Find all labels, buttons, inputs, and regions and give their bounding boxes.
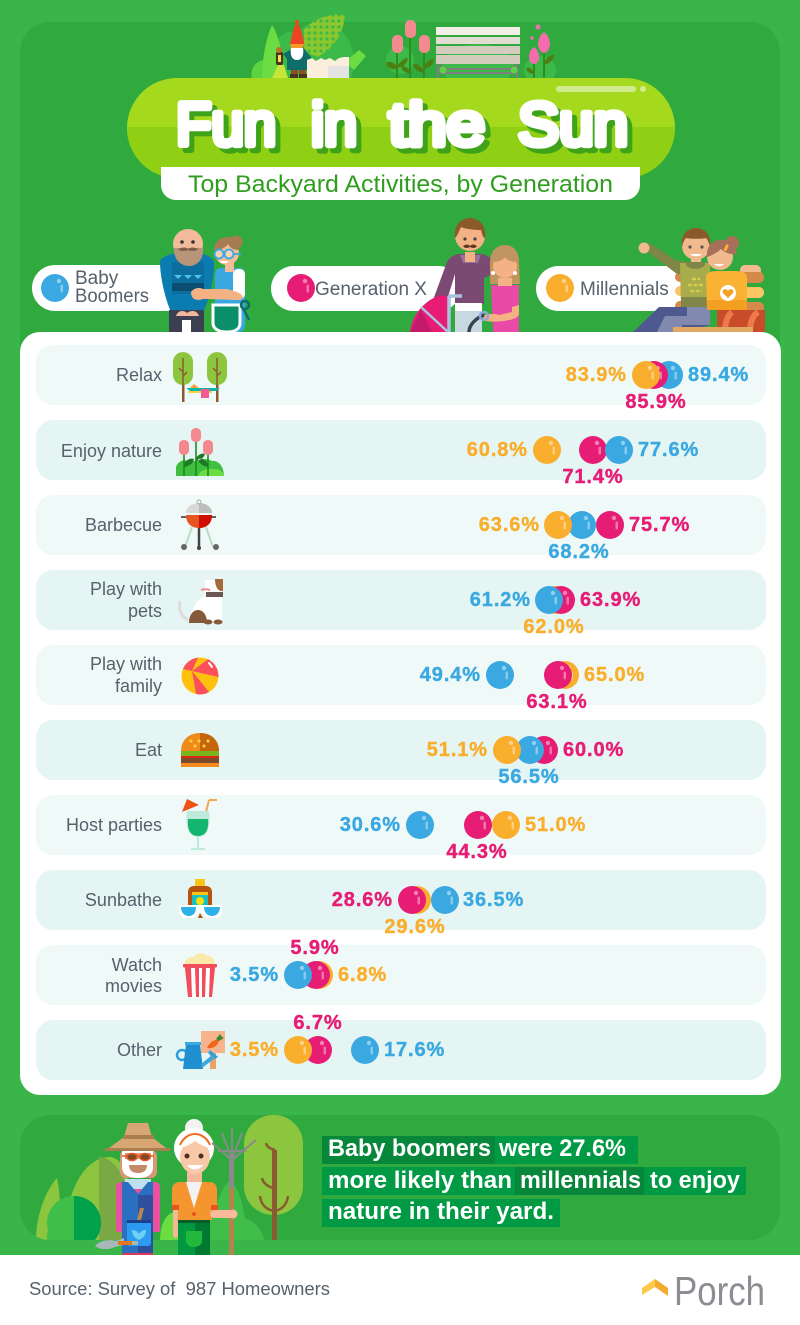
legend: generation x <box>271 266 461 311</box>
row: enjoy nature: Enjoy nature <box>61 441 162 461</box>
row: other: Other <box>117 1040 162 1060</box>
data: family bubbles: 49.4% <box>420 664 481 686</box>
data: pets bubbles: 62.0% <box>523 616 585 638</box>
data: movies bubbles: 6.8% <box>338 964 387 986</box>
illustration: garden trees and shrubs <box>36 1115 303 1250</box>
illustration: millennial couple on a bench <box>633 228 765 332</box>
row: watch movies: Watch <box>112 955 162 975</box>
row: sunbathe: Sunbathe <box>85 890 162 910</box>
title banner <box>127 78 675 178</box>
icon: dog <box>179 579 223 624</box>
panel: callout background <box>20 1115 780 1240</box>
row: eat: Eat <box>135 740 162 760</box>
data: movies bubbles <box>230 937 387 989</box>
row: barbecue <box>85 500 690 563</box>
data: eat bubbles <box>427 736 624 788</box>
row: barbecue: Barbecue <box>85 515 162 535</box>
illustration: gardener woman with rake <box>172 1119 256 1255</box>
data: family bubbles: 63.1% <box>526 691 588 713</box>
data: enjoy nature bubbles: 77.6% <box>638 439 699 461</box>
data: relax bubbles: 89.4% <box>688 364 749 386</box>
data: parties bubbles: 44.3% <box>446 841 508 863</box>
icon: hammock between trees <box>173 352 227 402</box>
row: play with pets <box>90 579 641 638</box>
data: family bubbles <box>420 661 645 713</box>
title text <box>176 91 628 158</box>
data: enjoy nature bubbles <box>467 436 699 488</box>
logo: Porch <box>642 1268 765 1314</box>
data: movies bubbles: 3.5% <box>230 964 279 986</box>
data: eat bubbles: 51.1% <box>427 739 488 761</box>
callout text: were 27.6% <box>498 1135 626 1162</box>
data: parties bubbles: 51.0% <box>525 814 586 836</box>
row: enjoy nature <box>61 428 699 488</box>
subtitle: Top Backyard Activities, by Generation <box>188 171 613 198</box>
data: relax bubbles <box>566 361 749 413</box>
data: other bubbles <box>230 1012 445 1064</box>
data: parties bubbles: 30.6% <box>340 814 401 836</box>
row: relax <box>116 352 749 413</box>
data: relax bubbles: 83.9% <box>566 364 627 386</box>
data: movies bubbles: 5.9% <box>290 937 340 959</box>
row: eat <box>135 733 624 788</box>
illustration: gnome garden scene <box>251 15 366 102</box>
legend: generation x: Generation X <box>315 279 427 300</box>
data: barbecue bubbles: 68.2% <box>548 541 610 563</box>
row: play with family: family <box>115 676 162 696</box>
row: other <box>117 1012 445 1069</box>
row: host parties: Host parties <box>66 815 162 835</box>
icon: tulips <box>176 428 224 476</box>
footer band <box>0 1255 800 1325</box>
title text: in <box>311 91 357 158</box>
legend: millennials <box>536 266 706 311</box>
data: sunbathe bubbles: 36.5% <box>463 889 524 911</box>
row: sunbathe <box>85 879 524 938</box>
legend: baby boomers <box>32 265 202 311</box>
illustration: gardener man <box>95 1123 170 1255</box>
row: play with family <box>90 654 645 713</box>
callout text: to enjoy <box>650 1167 741 1194</box>
callout text <box>322 1135 746 1227</box>
row: play with pets: pets <box>128 601 162 621</box>
icon: popcorn <box>183 953 217 997</box>
icon: cocktail <box>182 799 217 850</box>
legend: baby boomers: Baby <box>75 268 119 289</box>
data: other bubbles: 17.6% <box>384 1039 445 1061</box>
icon: watering can and carrot sign <box>177 1031 225 1069</box>
icon: grill <box>181 500 219 550</box>
source note: Source: Survey of 987 Homeowners <box>29 1279 330 1299</box>
illustration: baby boomer couple <box>160 229 249 332</box>
legend: baby boomers: Boomers <box>75 286 149 307</box>
data: barbecue bubbles <box>479 511 690 563</box>
data: eat bubbles: 60.0% <box>563 739 624 761</box>
data: barbecue bubbles: 75.7% <box>629 514 690 536</box>
data: other bubbles: 3.5% <box>230 1039 279 1061</box>
illustration: generation x family with stroller <box>410 218 520 332</box>
icon: burger <box>181 733 219 767</box>
data: relax bubbles: 85.9% <box>625 391 687 413</box>
data: eat bubbles: 56.5% <box>498 766 560 788</box>
callout text: more likely than <box>328 1167 512 1194</box>
logo: Porch: Porch <box>674 1268 765 1314</box>
row: host parties <box>66 799 586 863</box>
data: other bubbles: 6.7% <box>293 1012 343 1034</box>
data: pets bubbles: 61.2% <box>470 589 531 611</box>
data: barbecue bubbles: 63.6% <box>479 514 540 536</box>
data: sunbathe bubbles: 28.6% <box>332 889 393 911</box>
panel: activities table <box>20 332 781 1095</box>
data: enjoy nature bubbles: 60.8% <box>467 439 528 461</box>
title text: the <box>389 91 485 158</box>
data: pets bubbles <box>470 586 641 638</box>
callout text: nature in their yard. <box>328 1198 554 1225</box>
subtitle <box>161 167 640 200</box>
row: relax: Relax <box>116 365 162 385</box>
data: sunbathe bubbles: 29.6% <box>384 916 446 938</box>
legend: millennials: Millennials <box>580 279 669 300</box>
title text: Fun <box>176 91 276 158</box>
callout text: millennials <box>520 1167 641 1194</box>
icon: beach ball <box>182 658 218 694</box>
callout text: Baby boomers <box>328 1135 491 1162</box>
row: play with pets: Play with <box>90 579 162 599</box>
title text: Sun <box>518 91 628 158</box>
data: enjoy nature bubbles: 71.4% <box>562 466 624 488</box>
illustration: tulips and bench scene <box>386 20 556 88</box>
row: play with family: Play with <box>90 654 162 674</box>
row: watch movies: movies <box>105 976 162 996</box>
data: family bubbles: 65.0% <box>584 664 645 686</box>
icon: sunscreen and sunglasses <box>179 879 222 918</box>
data: parties bubbles <box>340 811 586 863</box>
row: watch movies <box>105 937 387 997</box>
data: sunbathe bubbles <box>332 886 524 938</box>
data: pets bubbles: 63.9% <box>580 589 641 611</box>
